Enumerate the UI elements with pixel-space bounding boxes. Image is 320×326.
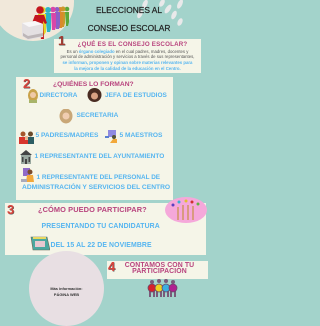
circle: more info (29, 251, 104, 326)
heading: ¿QUÉ ES EL CONSEJO ESCOLAR? (78, 41, 187, 48)
text: more info: Más información: (50, 286, 83, 291)
body text: personal de administración y servicios a través de sus representantes, (60, 54, 194, 59)
panel: contamos (107, 261, 208, 279)
icon: directora (28, 89, 38, 103)
label: secretaria: SECRETARIA (76, 112, 118, 119)
number 1: 1 (58, 33, 65, 48)
title: ELECCIONES AL (96, 5, 162, 15)
icon: town hall (20, 150, 32, 164)
body text: Es un órgano colegiado en el cual padres, madres, docentes y (67, 48, 188, 54)
number 3: 3 (7, 202, 14, 217)
icon: hands (165, 197, 207, 223)
panel: que es (54, 39, 201, 73)
text: fechas: DEL 15 AL 22 DE NOVIEMBRE (50, 242, 152, 249)
icon: calendar (30, 236, 50, 250)
icon: jefa (88, 88, 102, 102)
number 2: 2 (23, 76, 30, 91)
body text (60, 48, 194, 71)
panel: quienes (16, 77, 173, 200)
text: more info: PÁGINA WEB (54, 292, 79, 297)
body text: la mejora de la calidad de la educación en el Centro. (74, 66, 181, 71)
heading: como: ¿CÓMO PUEDO PARTICIPAR? (38, 205, 147, 214)
text: contamos: CONTAMOS CON TU (125, 262, 194, 269)
label: padres: 5 PADRES/MADRES (36, 132, 98, 139)
title (88, 5, 170, 33)
text: more info (50, 286, 83, 297)
label: personal (22, 174, 170, 191)
text: candidatura: PRESENTANDO TU CANDIDATURA (42, 223, 160, 230)
icon: teachers (105, 130, 117, 143)
icon: voters and ballot box (22, 6, 70, 40)
icon: staff (21, 168, 34, 182)
icon: people (148, 279, 178, 297)
label: directora: DIRECTORA (40, 92, 77, 99)
label: personal: ADMINISTRACIÓN Y SERVICIOS DEL CENTRO (22, 184, 170, 191)
text: contamos: PARTICIPACIÓN (132, 268, 187, 275)
heading: quienes: ¿QUIÉNES LO FORMAN? (53, 81, 134, 88)
label: personal: 1 REPRESENTANTE DEL PERSONAL DE (36, 174, 160, 181)
label: ayuntamiento: 1 REPRESENTANTE DEL AYUNTAMIENTO (34, 153, 164, 160)
icon: family (19, 132, 34, 144)
number 4: 4 (108, 259, 115, 274)
background decoration (0, 0, 183, 41)
label: maestros: 5 MAESTROS (120, 132, 162, 139)
title: CONSEJO ESCOLAR (88, 23, 170, 33)
icon: secretaria (60, 109, 72, 124)
body text: se informan, proponen y opinan sobre materias relevantes para (63, 60, 192, 65)
label: jefa: JEFA DE ESTUDIOS (105, 92, 167, 99)
panel: como (5, 203, 206, 255)
text: contamos (125, 262, 194, 275)
